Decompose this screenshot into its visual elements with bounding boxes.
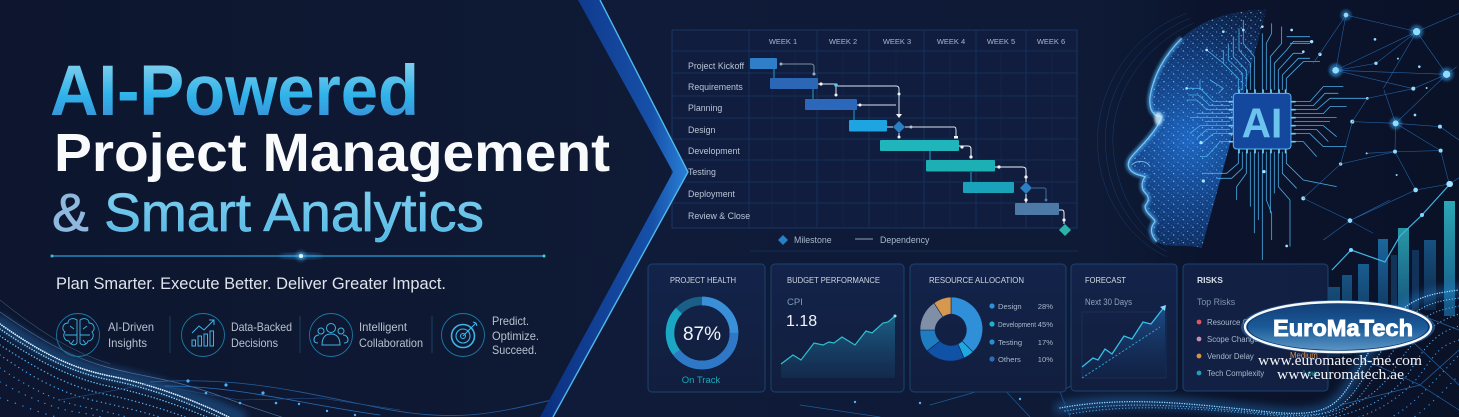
task labels: Testing xyxy=(688,167,716,177)
panel: resource allocation xyxy=(910,264,1066,392)
legend: 28% xyxy=(1038,302,1053,311)
icon: team xyxy=(310,314,352,356)
donut 87% xyxy=(670,301,734,365)
label: AI-Driven Insights: Insights xyxy=(108,336,147,350)
line chart xyxy=(781,314,896,378)
label: Data-Backed Decisions xyxy=(231,320,292,350)
legend: Development xyxy=(998,320,1037,329)
milestones xyxy=(893,121,1071,236)
week headers: WEEK 1 xyxy=(769,37,797,46)
heading: RISKS xyxy=(1197,275,1223,285)
risk list: Vendor Delay xyxy=(1207,352,1254,361)
gantt legend: Milestone xyxy=(794,235,832,245)
background: right panel xyxy=(553,0,1459,417)
heading: BUDGET PERFORMANCE xyxy=(787,276,880,285)
label: Predict. Optimize. Succeed.: Predict. xyxy=(492,314,529,328)
gantt bars xyxy=(750,58,1059,215)
website addresses: www.euromatech-me.com xyxy=(1258,353,1423,369)
logo name: EuroMaTech xyxy=(1273,315,1413,341)
week headers: WEEK 6 xyxy=(1037,37,1065,46)
icon: brain xyxy=(56,314,100,356)
legend: 45% xyxy=(1038,320,1053,329)
label: Intelligent Collaboration: Collaboration xyxy=(359,336,423,350)
heading: PROJECT HEALTH xyxy=(670,276,736,285)
task labels: Design xyxy=(688,125,715,135)
task labels: Project Kickoff xyxy=(688,61,745,71)
website addresses xyxy=(1258,353,1423,383)
CPI value: 1.18 xyxy=(786,313,817,330)
heading: FORECAST xyxy=(1085,276,1126,285)
week headers: WEEK 5 xyxy=(987,37,1015,46)
panel: forecast xyxy=(1071,264,1177,391)
chevron divider xyxy=(540,0,688,417)
subtitle: Next 30 Days xyxy=(1085,297,1133,307)
title line: AI-Powered: AI-Powered xyxy=(50,52,419,131)
head silhouette xyxy=(1128,9,1267,248)
task labels: Deployment xyxy=(688,189,735,199)
background bar chart: bottom right xyxy=(1328,181,1455,357)
AI chip xyxy=(1229,89,1296,153)
particle wave: bottom right xyxy=(800,290,1459,417)
title xyxy=(50,52,610,243)
legend: Testing xyxy=(998,338,1022,347)
panel: risks xyxy=(1183,264,1328,391)
week headers: WEEK 4 xyxy=(937,37,965,46)
legend xyxy=(989,302,1053,364)
label: Data-Backed Decisions: Decisions xyxy=(231,336,278,350)
label: AI-Driven Insights: AI-Driven xyxy=(108,320,154,334)
title line: Project Management: Project Management xyxy=(54,123,610,183)
icon: growth chart xyxy=(182,314,224,356)
label: Intelligent Collaboration: Intelligent xyxy=(359,320,408,334)
logo: EuroMaTech xyxy=(1241,300,1435,354)
neural network xyxy=(1303,10,1459,240)
feature row xyxy=(56,314,539,357)
subtitle: Top Risks xyxy=(1197,297,1236,307)
risk list: Tech Complexity xyxy=(1207,369,1264,378)
label: Predict. Optimize. Succeed.: Optimize. xyxy=(492,329,539,343)
task labels: Requirements xyxy=(688,82,743,92)
status: On Track xyxy=(682,375,721,386)
background: left panel xyxy=(0,0,700,417)
gantt chart xyxy=(672,30,1078,251)
task labels: Planning xyxy=(688,103,722,113)
legend: 10% xyxy=(1038,355,1053,364)
value: 87% xyxy=(683,324,721,345)
head node dots xyxy=(1185,25,1369,247)
dependency links xyxy=(774,62,1066,224)
label: Predict. Optimize. Succeed. xyxy=(492,314,539,357)
panel: budget performance xyxy=(771,264,904,392)
donut chart xyxy=(920,297,983,361)
task labels: Development xyxy=(688,146,740,156)
label: Predict. Optimize. Succeed.: Succeed. xyxy=(492,343,537,357)
CPI: CPI xyxy=(787,297,803,308)
task labels xyxy=(688,61,750,221)
panel: project health xyxy=(648,264,765,392)
week headers: WEEK 2 xyxy=(829,37,857,46)
website addresses: www.euromatech.ae xyxy=(1277,367,1404,383)
week headers: WEEK 3 xyxy=(883,37,911,46)
legend: 17% xyxy=(1038,338,1053,347)
risk list: Resource Over xyxy=(1207,318,1260,327)
icon: target xyxy=(442,314,484,356)
title line: & Smart Analytics: & Smart Analytics xyxy=(52,183,484,243)
label: Intelligent Collaboration xyxy=(359,320,423,350)
head with circuit brain xyxy=(1097,9,1459,260)
forecast chart xyxy=(1082,305,1166,378)
task labels: Review & Close xyxy=(688,211,750,221)
legend: Design xyxy=(998,302,1022,311)
glowing divider line xyxy=(50,252,546,260)
particle wave: bottom left xyxy=(0,300,560,417)
gantt frame and grid xyxy=(672,30,1078,251)
gantt legend: Dependency xyxy=(880,235,930,245)
risk list xyxy=(1197,318,1318,378)
heading: RESOURCE ALLOCATION xyxy=(929,276,1024,285)
label: Data-Backed Decisions: Data-Backed xyxy=(231,320,292,334)
gantt legend xyxy=(778,235,930,245)
risk list: Medium xyxy=(1290,351,1318,360)
week headers xyxy=(769,37,1065,46)
circuit traces xyxy=(1187,20,1367,260)
label: AI-Driven Insights xyxy=(108,320,154,350)
risk list: Scope Change xyxy=(1207,335,1259,344)
risk list: Low xyxy=(1303,369,1318,378)
AI chip label: AI xyxy=(1242,101,1282,147)
legend: Others xyxy=(998,355,1021,364)
orbit rings xyxy=(1097,13,1193,257)
tagline: Plan Smarter. Execute Better. Deliver Greater Impact. xyxy=(56,275,446,293)
